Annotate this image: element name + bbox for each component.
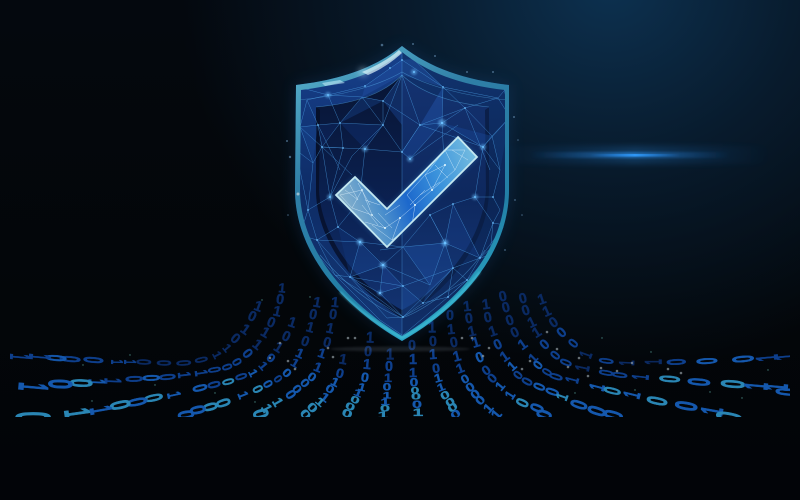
left stream 7 <box>342 332 374 417</box>
right stream 3: 1 <box>488 407 506 423</box>
left stream 1: 0 <box>190 355 210 365</box>
left stream 3: 0 <box>230 371 250 383</box>
left stream 8: 1 <box>380 397 390 407</box>
right stream 4: 0 <box>484 370 500 386</box>
left stream 1: 1 <box>251 298 265 316</box>
left stream 4: 0 <box>249 382 267 396</box>
left stream 2: 0 <box>264 314 278 332</box>
left stream 6: 0 <box>323 382 337 396</box>
left stream 5 <box>253 296 338 417</box>
left stream 1: 1 <box>22 352 58 362</box>
right stream 2: 0 <box>438 387 452 403</box>
left stream 4: 0 <box>307 306 319 324</box>
left stream 5: 1 <box>269 395 287 410</box>
right stream 7: 1 <box>738 381 776 391</box>
left stream 4: 0 <box>260 377 276 391</box>
right stream 1 <box>408 338 424 419</box>
right stream 4: 0 <box>478 361 494 379</box>
left stream 1: 0 <box>39 353 73 363</box>
left stream 1: 0 <box>53 354 87 364</box>
left stream 2: 1 <box>9 381 57 393</box>
left stream 1: 1 <box>2 352 38 362</box>
left stream 2: 1 <box>190 369 210 377</box>
right stream 2: 1 <box>432 370 444 386</box>
right stream 2: 1 <box>435 380 447 394</box>
right stream 4: 1 <box>466 323 478 341</box>
shield frame <box>295 46 509 341</box>
left stream 3: 1 <box>162 390 184 400</box>
right stream 5: 0 <box>482 309 494 327</box>
left stream 4: 1 <box>312 294 322 312</box>
right stream 1: 0 <box>411 392 421 402</box>
right stream 4: 0 <box>464 311 474 327</box>
left stream 1: 0 <box>77 355 109 365</box>
left stream 1: 0 <box>245 308 259 326</box>
right stream 4: 0 <box>532 407 558 423</box>
right stream 4: 0 <box>525 400 549 416</box>
left stream 5: 0 <box>305 369 319 385</box>
left stream 2: 0 <box>218 361 236 373</box>
left stream 2: 0 <box>203 365 223 375</box>
right stream 8: 0 <box>564 335 582 351</box>
left stream 5: 1 <box>324 320 336 338</box>
right stream 4: 0 <box>473 349 487 367</box>
left stream 3: 0 <box>103 397 137 413</box>
right stream 5: 1 <box>497 348 513 366</box>
right stream 1: 0 <box>408 338 416 354</box>
right stream 5: 0 <box>510 367 526 383</box>
left stream 5: 0 <box>247 406 273 422</box>
right stream 3: 1 <box>480 400 497 416</box>
left stream 7: 1 <box>366 329 374 347</box>
left stream 1 <box>2 298 265 367</box>
right stream 5: 1 <box>553 391 573 403</box>
right stream 2: 0 <box>429 334 437 350</box>
right stream 6: 1 <box>515 336 531 354</box>
right stream 1: 0 <box>411 384 419 396</box>
right stream 6: 0 <box>599 384 627 398</box>
right stream 3: 0 <box>458 371 472 387</box>
right stream 7: 1 <box>529 324 545 342</box>
left stream 6: 0 <box>297 407 313 423</box>
left stream 1: 1 <box>219 341 235 355</box>
right stream 7: 1 <box>525 314 539 332</box>
sparkles around shield <box>286 43 523 251</box>
left stream 8: 1 <box>384 371 392 385</box>
left stream 4: 0 <box>279 365 295 381</box>
right stream 6: 1 <box>562 374 584 386</box>
left stream 3: 0 <box>217 376 237 388</box>
left stream 4: 0 <box>172 408 198 422</box>
left stream 5: 1 <box>330 295 340 311</box>
left stream 2: 1 <box>83 379 111 385</box>
right stream 2: 0 <box>443 394 457 410</box>
left stream 3: 1 <box>57 406 97 420</box>
right stream 6: 0 <box>546 371 568 383</box>
right stream 2: 0 <box>446 400 460 416</box>
lens flare streak <box>500 146 770 164</box>
left stream 2: 1 <box>278 280 286 296</box>
particles around binary streams <box>82 296 769 403</box>
right stream 3: 0 <box>467 386 483 402</box>
right stream 8: 0 <box>691 357 723 365</box>
right stream 7 <box>517 290 800 398</box>
right stream 8: 1 <box>639 359 667 365</box>
left stream 2: 0 <box>63 378 97 388</box>
left stream 6: 1 <box>338 351 348 369</box>
left stream 6: 1 <box>313 395 328 410</box>
left stream 7: 0 <box>340 407 355 422</box>
right stream 2: 0 <box>431 360 441 376</box>
left stream 6: 0 <box>334 365 346 381</box>
left stream 8: 1 <box>386 346 394 364</box>
left stream 1: 0 <box>152 360 174 366</box>
left stream 5: 0 <box>328 307 338 323</box>
left stream 2: 0 <box>154 373 180 381</box>
right stream 7: 0 <box>595 368 619 378</box>
left stream 1: 0 <box>172 359 194 367</box>
left stream 8: 1 <box>378 410 388 420</box>
right stream 3: 1 <box>451 348 463 366</box>
left stream 2: 0 <box>238 346 256 362</box>
left stream 7: 0 <box>349 393 362 407</box>
right stream 5: 0 <box>566 397 594 413</box>
right stream 7: 0 <box>682 376 718 388</box>
left stream 7: 1 <box>352 386 364 400</box>
left stream 4: 0 <box>298 333 312 351</box>
left stream 3: 0 <box>279 328 293 346</box>
left stream 5: 1 <box>258 401 276 415</box>
left stream 5: 0 <box>289 382 305 396</box>
right stream 7: 0 <box>517 290 529 308</box>
right stream 7: 0 <box>557 356 577 370</box>
left stream 1: 1 <box>237 321 253 339</box>
right stream 6: 0 <box>709 409 751 425</box>
left stream 2: 0 <box>275 292 285 308</box>
left stream 3 <box>15 317 296 417</box>
left stream 3: 0 <box>138 391 168 405</box>
right stream 2: 1 <box>429 347 437 363</box>
left stream 6: 1 <box>328 374 342 390</box>
right stream 5 <box>482 298 624 417</box>
left stream 1: 1 <box>120 359 140 365</box>
left stream 4 <box>178 296 320 417</box>
right stream 8: 0 <box>662 358 692 366</box>
left stream 1: 0 <box>132 359 154 365</box>
left stream 4: 0 <box>184 403 210 417</box>
right stream 2: 1 <box>428 319 436 337</box>
right stream 1: 1 <box>409 352 417 368</box>
right stream 6 <box>499 290 742 417</box>
left stream 7: 0 <box>360 369 371 385</box>
right stream 6: 0 <box>538 365 556 379</box>
right stream 8: 0 <box>554 324 570 342</box>
left stream 2 <box>9 280 286 393</box>
left stream 6: 0 <box>304 400 320 416</box>
left stream 2: 0 <box>41 378 79 390</box>
right stream 8: 0 <box>595 356 619 366</box>
right stream 8: 1 <box>577 349 597 361</box>
left stream 3: 1 <box>245 367 261 380</box>
right stream 1: 0 <box>410 375 419 389</box>
right stream 1: 0 <box>412 399 422 411</box>
shield <box>295 46 510 341</box>
left stream 5: 0 <box>321 334 333 352</box>
right stream 6: 1 <box>525 350 541 366</box>
right stream 4 <box>463 300 552 417</box>
left stream 5: 0 <box>297 375 313 391</box>
shield inner dark panels <box>316 75 489 318</box>
left stream 3: 0 <box>120 394 154 410</box>
right stream 6: 0 <box>530 357 546 373</box>
left stream 1: 0 <box>227 330 243 348</box>
left stream 3: 1 <box>82 403 118 417</box>
left stream 4: 1 <box>234 389 252 401</box>
right stream 5: 0 <box>597 406 629 424</box>
mesh glowing nodes <box>307 59 494 318</box>
right stream 3: 0 <box>472 392 488 408</box>
right stream 4: 1 <box>462 299 472 315</box>
left stream 3: 0 <box>6 412 60 422</box>
right stream 4: 1 <box>470 334 482 352</box>
left stream 8: 1 <box>383 389 391 401</box>
right stream 4: 1 <box>492 378 508 394</box>
right stream 7: 0 <box>546 347 564 363</box>
left stream 4: 1 <box>304 319 316 337</box>
left stream 2: 0 <box>137 374 163 382</box>
right stream 7: 1 <box>626 373 654 381</box>
left stream 1: 1 <box>209 349 225 362</box>
right stream 3: 0 <box>449 334 459 352</box>
left stream 4: 0 <box>270 372 286 386</box>
right stream 3 <box>446 310 503 417</box>
right stream 1: 1 <box>409 364 417 380</box>
left stream 5: 1 <box>311 358 325 376</box>
right stream 7: 0 <box>520 302 532 320</box>
left stream 7: 0 <box>363 344 373 360</box>
right stream 6: 1 <box>695 404 731 418</box>
left stream 6: 1 <box>317 389 333 405</box>
right stream 6: 0 <box>508 324 522 342</box>
left stream 6 <box>300 354 346 417</box>
right stream 6: 0 <box>640 393 674 409</box>
right stream 5: 0 <box>491 336 505 354</box>
right stream 2: 0 <box>449 407 463 423</box>
left stream 5: 0 <box>281 387 299 403</box>
right stream 4: 1 <box>501 388 519 402</box>
right stream 5: 0 <box>581 402 613 420</box>
right stream 6: 0 <box>497 288 509 306</box>
left stream 3: 1 <box>270 339 286 357</box>
left stream 2: 1 <box>271 303 283 321</box>
left stream 2: 0 <box>120 375 146 383</box>
frame highlights <box>298 50 480 338</box>
right stream 8: 1 <box>749 353 785 363</box>
right stream 7: 0 <box>608 370 632 380</box>
right stream 7: 0 <box>537 336 553 354</box>
left stream 3: 1 <box>256 359 270 373</box>
shield glow <box>295 46 509 341</box>
check mark <box>336 137 477 247</box>
right stream 6: 1 <box>584 380 610 393</box>
left stream 4: 0 <box>211 395 235 411</box>
right stream 8: 0 <box>546 314 562 332</box>
left stream 4: 1 <box>288 355 302 371</box>
left stream 8: 0 <box>385 359 393 375</box>
shield outer panels <box>295 46 509 341</box>
left stream 4: 1 <box>293 344 307 362</box>
left stream 3: 0 <box>188 382 212 394</box>
mesh facets <box>300 59 510 317</box>
right stream 4: 0 <box>512 395 534 411</box>
left stream 7: 1 <box>362 357 372 373</box>
right stream 6: 0 <box>504 312 516 330</box>
right stream 1: 1 <box>413 407 424 419</box>
left stream 1: 1 <box>107 359 127 365</box>
mesh lines <box>296 46 510 341</box>
left stream 5: 1 <box>316 344 328 362</box>
left stream 3: 0 <box>264 350 278 366</box>
left stream 2: 1 <box>99 378 127 384</box>
right stream 3: 0 <box>462 379 478 395</box>
right stream 6: 0 <box>669 398 705 414</box>
right stream 5: 0 <box>519 375 537 389</box>
left stream 3: 0 <box>203 379 223 391</box>
right stream 3: 1 <box>454 359 467 377</box>
right stream 8 <box>536 291 800 366</box>
right stream 3: 1 <box>446 322 456 338</box>
left stream 2: 1 <box>258 324 272 342</box>
right stream 7: 0 <box>654 374 686 384</box>
right stream 8: 1 <box>540 303 554 321</box>
right stream 8: 1 <box>615 360 639 366</box>
left stream 8: 0 <box>383 381 391 393</box>
right stream 8: 0 <box>726 354 760 364</box>
left stream 7: 1 <box>356 380 368 394</box>
right stream 7: 0 <box>713 378 753 390</box>
right stream 6: 0 <box>500 299 512 317</box>
left stream 8: 0 <box>380 404 390 414</box>
floor light haze under shield <box>330 346 470 352</box>
right stream 5: 0 <box>530 380 550 394</box>
left stream 8 <box>378 348 394 417</box>
binary data streams <box>2 280 800 425</box>
left stream 2: 1 <box>249 336 265 354</box>
right stream 6: 1 <box>619 388 647 401</box>
right stream 2 <box>428 321 460 417</box>
right stream 7: 1 <box>571 363 595 373</box>
right stream 7: 1 <box>758 382 796 392</box>
right stream 5: 1 <box>481 297 491 313</box>
left stream 2: 1 <box>173 371 193 379</box>
right stream 3: 0 <box>446 308 454 324</box>
left stream 3: 1 <box>286 314 298 332</box>
right stream 5: 0 <box>542 385 564 399</box>
right stream 8: 1 <box>536 291 548 309</box>
right stream 5: 1 <box>504 358 520 374</box>
left stream 4: 0 <box>198 400 222 414</box>
right stream 5: 1 <box>487 323 499 341</box>
left stream 7: 0 <box>343 400 357 414</box>
left stream 2: 0 <box>229 355 245 369</box>
